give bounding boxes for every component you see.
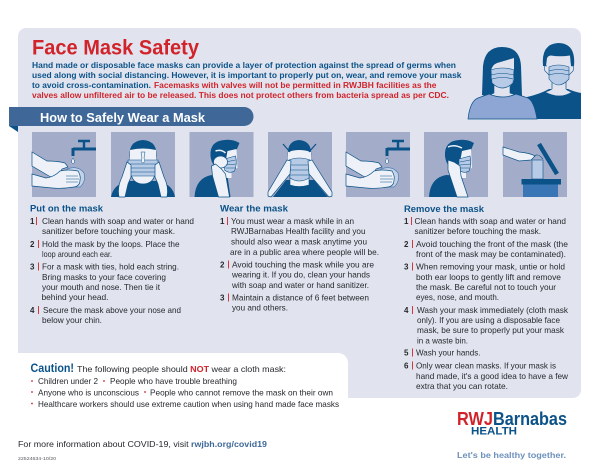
step list: put on: behind your head. <box>42 293 108 302</box>
step list: remove: front of the mask may be contaminated). <box>416 250 566 259</box>
step list: put on: Hold the mask by the loops. Place the <box>42 240 180 249</box>
step list: put on: Clean hands with soap and water or hand <box>42 217 194 226</box>
step list: remove <box>404 217 569 391</box>
intro text block: to avoid cross-contamination. <box>32 80 151 90</box>
step list: wear: with soap and water or hand sanitizer. <box>231 281 369 290</box>
column: put on the mask <box>30 204 194 325</box>
caution intro: The following people should NOT wear a cloth mask: <box>77 364 286 374</box>
caution list: Children under 2 <box>38 377 98 386</box>
step list: remove: When removing your mask, untie or hold <box>416 262 565 272</box>
step list: remove: Wash your mask immediately (cloth mask <box>417 306 569 315</box>
step list: remove: Wash your hands. <box>416 348 480 358</box>
title: Face Mask Safety <box>32 36 199 60</box>
step list: wear: RWJBarnabas Health facility and you <box>231 227 366 236</box>
step list: remove: Only wear clean masks. If your mask is <box>416 362 556 370</box>
caution list <box>31 377 339 409</box>
panel: main background <box>18 28 581 398</box>
panel: caution <box>18 353 349 414</box>
step list: put on: Bring masks to your face covering <box>42 273 166 282</box>
step list: wear: 2 <box>220 260 225 270</box>
step list: remove: 4 <box>404 306 409 315</box>
step list: remove: only). If you are using a disposable face <box>417 316 560 325</box>
icon: adjusting mask with both hands <box>268 132 332 197</box>
icon: tying loops behind ear, side view <box>190 132 254 197</box>
step list: remove: extra that you can rotate. <box>416 382 508 391</box>
step list: remove: both ear loops to gently lift and remove <box>416 273 562 282</box>
step list: remove: in a waste bin. <box>417 336 468 346</box>
step list: remove: Clean hands with soap and water or hand <box>414 217 566 226</box>
icon: untying ear loops, side view <box>424 132 488 197</box>
step list: remove: Avoid touching the front of the mask (the <box>416 240 569 249</box>
job code: 22524634-10/20 <box>18 456 57 461</box>
step list: put on: loop around each ear. <box>42 250 112 259</box>
step list: put on: your mouth and nose. Then tie it <box>42 283 161 292</box>
logo: RWJBarnabas Health: HEALTH <box>471 426 517 438</box>
step list: wear: are in a public area where people will be. <box>230 248 379 257</box>
step list: put on: 2 <box>30 240 35 249</box>
step list: remove: eyes, nose, and mouth. <box>416 293 499 302</box>
step list: put on: 3 <box>30 262 35 272</box>
section banner <box>9 107 254 132</box>
intro text block: Facemasks with valves will not be permitted in RWJBH facilities as the <box>154 80 437 90</box>
caution list: People who have trouble breathing <box>110 377 237 386</box>
column: wear the mask <box>220 204 379 312</box>
step list: remove: 6 <box>404 362 409 370</box>
step list: wear: Avoid touching the mask while you are <box>232 260 375 270</box>
intro text block: Hand made or disposable face masks can provide a layer of protection against the spread of germs when <box>32 60 456 70</box>
step list: wear: 1 <box>220 217 225 226</box>
step list: remove: mask, be sure to properly put your mask <box>417 326 565 335</box>
step list: remove: 2 <box>404 240 409 249</box>
step list: put on: sanitizer before touching your mask. <box>42 227 175 236</box>
icon: washing hands under tap <box>32 132 96 197</box>
caution list: Healthcare workers should use extreme caution when using hand made face masks <box>38 400 339 409</box>
step list: wear <box>220 217 379 312</box>
step list: wear: You must wear a mask while in an <box>231 217 354 226</box>
intro text block: valves allow unfiltered air to be released. This does not protect others from bacteria spread as per CDC. <box>32 90 449 100</box>
illustration: two people wearing masks <box>468 43 581 119</box>
step list: wear: should also wear a mask anytime you <box>231 238 367 246</box>
heading: wear: Wear the mask <box>220 204 289 214</box>
step list: put on: below your chin. <box>42 316 102 325</box>
column: remove the mask <box>404 204 569 391</box>
step list: put on: Secure the mask above your nose and <box>43 306 181 315</box>
step list: wear: 3 <box>220 294 225 302</box>
intro text block: used along with social distancing. However, it is important to properly put on, wear, and remove your mask <box>32 70 462 80</box>
step list: put on <box>30 217 194 325</box>
step list: remove: 3 <box>404 262 409 272</box>
section banner: How to Safely Wear a Mask <box>40 110 206 125</box>
step list: wear: Maintain a distance of 6 feet between <box>232 294 369 302</box>
heading: put on: Put on the mask <box>30 204 104 214</box>
icon: holding mask by loops <box>111 132 175 197</box>
icon: washing hands again <box>346 132 410 197</box>
intro text block <box>32 60 462 100</box>
heading: remove: Remove the mask <box>404 204 485 215</box>
step list: remove: hand made, it's a good idea to have a few <box>416 372 568 381</box>
tagline: Let's be healthy together. <box>457 450 566 460</box>
logo: RWJBarnabas Health <box>457 409 567 438</box>
step list: remove: the mask. Be careful not to touch your <box>416 283 556 292</box>
caution list: Anyone who is unconscious <box>38 388 139 398</box>
step list: wear: wearing it. If you do, clean your hands <box>231 270 370 280</box>
caution list: People who cannot remove the mask on their own <box>150 388 333 398</box>
icon: dropping mask in waste bin <box>503 132 567 197</box>
step list: remove: 5 <box>404 348 409 358</box>
step list: put on: 4 <box>30 306 35 315</box>
step list: remove: 1 <box>404 217 409 226</box>
step list: remove: sanitizer before touching the mask. <box>414 227 541 236</box>
step list: put on: 1 <box>30 217 35 226</box>
step list: put on: For a mask with ties, hold each string. <box>42 262 179 272</box>
step list: wear: you and others. <box>232 304 288 312</box>
logo: RWJBarnabas Health: RWJ <box>457 409 493 429</box>
caution heading: Caution! <box>30 363 74 375</box>
footer: more information: For more information about COVID-19, visit rwjbh.org/covid19 <box>18 439 267 449</box>
logo: RWJBarnabas Health: Barnabas <box>493 409 567 429</box>
